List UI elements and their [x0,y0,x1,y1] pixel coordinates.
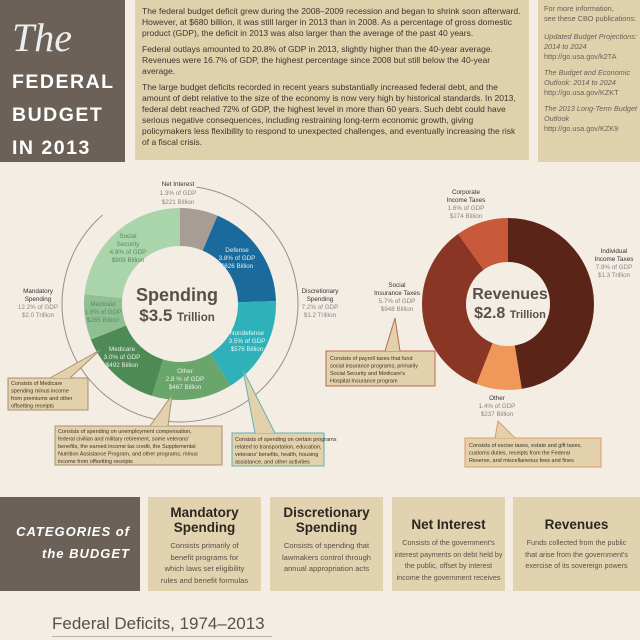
spending segment labels: $2.0 Trillion [22,312,55,319]
callout: nondefense: related to transportation, education, [235,444,322,450]
callout: other spending: income from offsetting receipts [58,459,133,465]
category: revenues: Revenues [545,517,608,532]
callout: nondefense: assistance, and other activities [235,460,310,466]
callout: nondefense: veterans' benefits, health, housing [235,452,318,458]
category: net interest: the public, offset by interest [405,561,492,570]
revenue labels: $274 Billion [450,213,483,220]
spending segment labels: 7.2% of GDP [302,304,338,311]
revenue labels: Income Taxes [595,256,633,263]
callout: other spending [55,395,222,465]
spending segment labels: Spending [25,296,52,303]
category: net interest [392,497,505,591]
spending outer ring [47,171,313,437]
categories heading box: CATEGORIES of [16,524,130,539]
publications panel: http://go.usa.gov/KZK9 [544,124,618,133]
callout: medicare: from premiums and other [11,396,73,402]
callout: other revenues: Reserve, and miscellaneous fees and fines [469,458,574,464]
category: discretionary: lawmakers control through [282,552,371,562]
spending center label [136,285,218,325]
revenues donut [444,240,572,368]
callout: other spending: Consists of spending on unemployment compensation, [58,429,192,435]
spending segment labels: Security [117,241,140,248]
callout: social insurance [326,318,435,386]
spending segment labels: Discretionary [302,288,339,295]
category: net interest: income the government receives [397,572,500,582]
callout: social insurance: Social Security and Medicare's [330,371,405,377]
callout: social insurance: Hospital Insurance program [330,378,398,384]
spending segment labels: 1.6% of GDP [85,309,121,316]
callout: nondefense: Consists of spending on certain programs [235,437,337,443]
intro text panel: Federal outlays amounted to 20.8% of GDP in 2013, slightly higher than the 40-year average. Revenues were 16.7% of GDP, the highest percentage since 2008 but still below the 40-year average. [142,44,493,76]
spending segment labels: Spending [307,296,334,303]
revenue labels: Other [489,395,505,402]
revenue labels [374,189,633,418]
publications panel: Updated Budget Projections: 2014 to 2024 [544,32,637,51]
publications panel [538,0,640,162]
revenue labels: Income Taxes [447,197,485,204]
spending segment labels: $808 Billion [112,257,145,264]
publications panel: The 2013 Long-Term Budget Outlook [544,104,637,123]
category: mandatory: Consists primarily of [170,541,239,550]
spending segment labels: Social [119,233,137,240]
publications panel: For more information, [544,4,614,13]
callout: medicare: Consists of Medicare [11,381,62,387]
spending segment labels: 3.5% of GDP [229,338,265,345]
intro text panel: The large budget deficits recorded in recent years substantially increased federal debt, and the amount of debt relative to the size of the economy is now very high by historical standards. In 2013, federal debt reached 72% of GDP, the highest level in more than 60 years. Such debt could have serious negative consequences, including restraining long-term economic growth, giving policymakers less flexibility to respond to unexpected challenges, and eventually increasing the risk of a fiscal crisis. [142,82,516,147]
category: mandatory: rules and benefit formulas [161,576,248,584]
spending segment labels: Nondefense [230,330,264,337]
publications panel: http://go.usa.gov/KZKT [544,88,619,97]
revenue labels: Social [388,282,406,289]
category: mandatory: which laws set eligibility [165,564,244,573]
publications panel: http://go.usa.gov/k2TA [544,52,616,61]
intro text panel: The federal budget deficit grew during the 2008–2009 recession and began to shrink soon afterward. However, at $680 billion, it was still larger in 2013 than in 2008. As a percentage of gross domestic product (GDP), the deficit in 2013 was also larger than the average of the past 40 years. [142,6,520,38]
category: mandatory: Spending [174,520,235,535]
intro text panel [135,0,529,160]
publications panel: see these CBO publications: [544,14,636,23]
categories heading box: the BUDGET [42,546,130,561]
category: revenues: Funds collected from the public [527,538,626,547]
revenue labels: 1.6% of GDP [448,205,484,212]
spending segment labels: 3.8% of GDP [219,255,255,262]
callout: social insurance: Consists of payroll taxes that fund [330,356,413,362]
category: net interest: Net Interest [411,517,486,532]
revenue labels: Insurance Taxes [374,290,420,297]
callout: other revenues [465,421,601,467]
callout: medicare: spending minus income [11,388,69,394]
category: discretionary: annual appropriation acts [284,564,369,573]
callout: other revenues: Consists of excise taxes, estate and gift taxes, [469,443,582,449]
spending segment labels: $1.2 Trillion [304,312,337,319]
spending segment labels: $221 Billion [162,199,195,206]
spending segment labels: 1.3% of GDP [160,190,196,197]
deficits heading: Federal Deficits, 1974–2013 [52,614,265,633]
callout: other spending: Nutrition Assistance Program, and other programs, minus [58,452,198,458]
revenues center label: Revenues [472,286,548,303]
spending segment labels: Mandatory [23,288,54,295]
category: net interest: interest payments on debt held by [395,550,502,558]
spending segment labels: Net Interest [162,181,195,188]
spending segment labels: Other [177,368,193,375]
title panel: IN 2013 [12,137,91,159]
revenue labels: 5.7% of GDP [379,298,415,305]
category: discretionary: Spending [296,520,357,535]
callout: medicare [8,350,100,410]
revenue labels: $1.3 Trillion [598,272,631,279]
charts [8,181,634,468]
category: discretionary [270,497,383,591]
category: discretionary: Discretionary [283,505,370,520]
spending segment labels: Medicaid [90,301,116,308]
spending segment labels: 4.9% of GDP [110,249,146,256]
revenue labels: 7.9% of GDP [596,264,632,271]
spending segment labels: $265 Billion [87,317,120,324]
category: revenues: that arise from the government's [525,550,628,558]
spending segment labels: $492 Billion [106,362,139,369]
title panel: BUDGET [12,104,103,126]
callout: other spending: federal civilian and military retirement, some veterans' [58,436,189,442]
category: mandatory: benefit programs for [171,552,238,562]
spending segment labels: Defense [225,247,249,254]
spending segment labels: $626 Billion [221,263,254,270]
category: mandatory: Mandatory [170,505,239,520]
spending donut [103,227,257,381]
revenue labels: Individual [601,248,627,255]
callout: medicare: offsetting receipts [11,404,54,410]
callout: social insurance: social insurance programs, primarily [330,364,418,370]
revenues center label [472,286,548,322]
spending center label: $3.5 Trillion [139,306,215,325]
spending segment labels: Medicare [109,346,135,353]
spending segment labels [18,181,339,391]
category: revenues [513,497,640,591]
categories heading box [0,497,140,591]
spending segment labels: $467 Billion [169,384,202,391]
spending segment labels: 12.2% of GDP [18,304,58,311]
publications panel: The Budget and Economic Outlook: 2014 to 2024 [544,68,630,87]
category: mandatory [148,497,261,591]
spending segment labels: 2.8 % of GDP [166,376,204,383]
spending segment labels: 3.0% of GDP [104,354,140,361]
title panel: The [12,15,72,60]
revenue labels: $237 Billion [481,411,514,418]
title panel [0,0,125,162]
revenue labels: $948 Billion [381,306,414,313]
category: discretionary: Consists of spending that [284,541,369,550]
title panel: FEDERAL [12,71,115,93]
revenues center label: $2.8 Trillion [474,305,546,322]
category: revenues: exercise of its sovereign powers [525,561,628,570]
spending segment labels: $576 Billion [231,346,264,353]
callout: other revenues: customs duties, receipts from the Federal [469,450,570,456]
revenue labels: 1.4% of GDP [479,403,515,410]
callout: nondefense [232,370,337,466]
category: net interest: Consists of the government's [402,538,495,547]
revenue labels: Corporate [452,189,480,196]
spending center label: Spending [136,285,218,305]
callout: other spending: benefits, the earned income tax credit, the Supplemental [58,444,196,450]
